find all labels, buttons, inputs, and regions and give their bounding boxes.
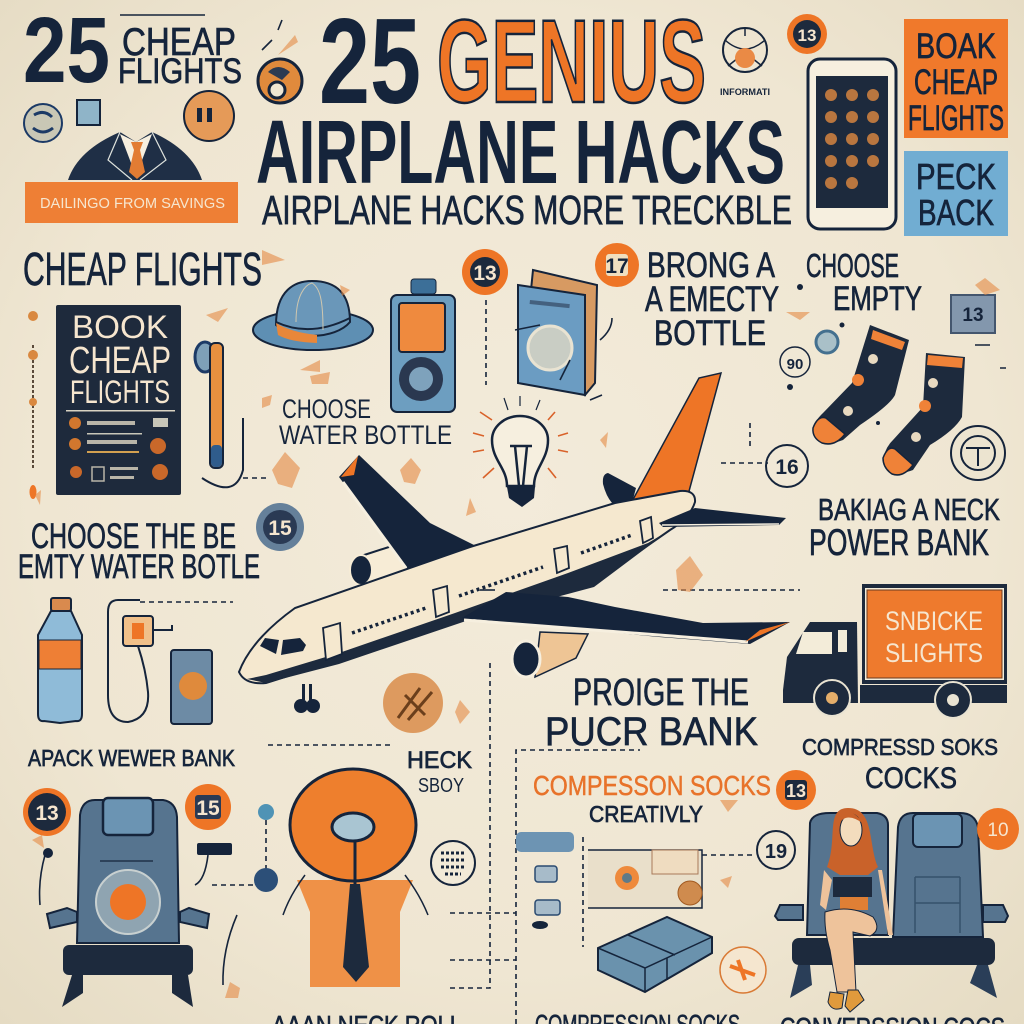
belly shading (247, 530, 670, 683)
icon: airplane seat with emblem (47, 798, 209, 1007)
number badge 13 right (776, 770, 816, 810)
text: bring an empty bottle: BOTTLE (654, 314, 766, 353)
armrests (775, 905, 1008, 922)
icon: smartphone (808, 59, 896, 229)
number badge 10 right (977, 808, 1019, 850)
number badge 19: 19 (765, 841, 787, 863)
text: bring an empty bottle: BRONG A (647, 246, 776, 285)
icon: business suit with banner: DAILINGO FROM SAVINGS (40, 195, 225, 212)
icon: socks (813, 325, 965, 475)
far stabiliser (603, 473, 636, 503)
far wing (339, 455, 476, 569)
text: choose the best empty water bottle: EMTY WATER BOTLE (18, 548, 260, 586)
top (833, 877, 872, 897)
icon: book (56, 305, 181, 495)
number badge 17: 17 (605, 255, 629, 278)
text: compression socks: COMPESSON SOCKS (533, 770, 771, 801)
text: compression socks (533, 770, 771, 827)
text: compressed socks: COMPRESSD SOKS (802, 734, 998, 760)
shoes (828, 990, 864, 1012)
title block (256, 0, 792, 233)
icon: delivery truck: SNBICKE (885, 606, 983, 636)
text: produce the power bank: PUCR BANK (545, 710, 758, 754)
icon: woman seated on airplane seats (775, 808, 1008, 1012)
bench (792, 938, 995, 965)
blue card: peck back: PECK (916, 156, 996, 197)
fuselage (239, 491, 695, 683)
icon: music player (391, 279, 455, 412)
right seat back (893, 813, 983, 937)
text: compression socks: CREATIVLY (589, 801, 703, 827)
icon: small badges top-left (24, 59, 302, 142)
doors (323, 517, 653, 660)
landing gear (294, 684, 320, 713)
near wing (462, 592, 790, 644)
icon: globe badge: INFORMATI (720, 87, 770, 97)
icon: compass circle (720, 947, 766, 993)
icon: pen (195, 342, 243, 487)
text: choose the best empty water bottle (18, 517, 260, 586)
heading: cheap flights: CHEAP FLIGHTS (23, 243, 262, 295)
text: choose water bottle: WATER BOTTLE (279, 420, 452, 450)
number badge 15 left (185, 784, 231, 830)
text: bring an empty bottle: A EMECTY (645, 280, 779, 319)
number badge 13 left: 13 (35, 802, 59, 825)
top-left heading: FLIGHTS (118, 52, 242, 91)
text: neck spot: SBOY (418, 775, 464, 797)
blue card: peck back (904, 151, 1008, 236)
blue card: peck back: BACK (918, 192, 994, 233)
text: produce the power bank: PROIGE THE (573, 672, 749, 714)
icon: ring marker (780, 331, 838, 377)
icon: power bank (171, 650, 212, 724)
icon: packing cube (598, 917, 712, 992)
icon: water bottle (38, 598, 82, 723)
text: choose empty: CHOOSE (806, 247, 899, 284)
diagram: packing chart (516, 832, 702, 929)
icon: small calendar: 13 (962, 305, 984, 326)
text: pack power bank: APACK WEWER BANK (28, 745, 236, 771)
icon: small calendar (951, 295, 995, 333)
text: compressed socks: COCKS (865, 762, 957, 795)
bottom cut-off text (272, 1009, 1005, 1024)
face (840, 814, 862, 846)
crossed legs (825, 909, 877, 992)
icon: delivery truck (783, 584, 1007, 718)
number badge 15 (256, 503, 304, 551)
orange card: book cheap flights: BOAK (916, 27, 996, 66)
rear stabiliser (659, 508, 786, 527)
airplane (239, 373, 790, 713)
icon: beaded string (28, 311, 38, 499)
text: choose water bottle: CHOOSE (282, 394, 371, 424)
text: compressed socks (802, 734, 998, 795)
icon: passport book (518, 270, 597, 395)
icon: business suit with banner (25, 132, 238, 223)
icon: round stamp (951, 426, 1005, 480)
number badge 13 top: 13 (798, 26, 816, 45)
left seat back (807, 813, 888, 935)
icon: light bulb (473, 396, 568, 507)
text: choose empty (806, 247, 922, 318)
icon: left connector node (254, 804, 278, 892)
top-left heading (23, 0, 242, 102)
number badge 15 left: 15 (196, 797, 220, 820)
icon: ring marker: 90 (787, 356, 803, 373)
icon: delivery truck: SLIGHTS (885, 638, 983, 668)
text: neck spot (407, 747, 472, 797)
bench legs (790, 965, 997, 998)
midriff (840, 897, 868, 910)
icon: hat (253, 281, 373, 350)
connector lines (140, 300, 800, 1024)
arms (820, 870, 893, 935)
icon: globe badge (720, 28, 770, 97)
text: choose the best empty water bottle: CHOOSE THE BE (31, 517, 236, 556)
icon: medallion (383, 673, 443, 733)
number badge 16 (766, 445, 808, 487)
icon: book: CHEAP (69, 340, 171, 382)
number badge 10 right: 10 (987, 820, 1009, 841)
far engine (350, 546, 418, 590)
cockpit window (260, 638, 306, 655)
number badge 13 (462, 249, 508, 295)
tail fin (630, 373, 721, 505)
number badge 13 top (787, 14, 827, 54)
number badge 15: 15 (268, 517, 292, 540)
text: neck spot: HECK (407, 747, 472, 774)
icon: book: BOOK (72, 309, 168, 345)
near engine (512, 632, 588, 677)
number badge 13 right: 13 (786, 781, 806, 801)
icon: neck pillow with figure (283, 769, 428, 987)
text: produce the power bank (545, 672, 758, 754)
subtitle: AIRPLANE HACKS MORE TRECKBLE (262, 187, 792, 233)
orange card: book cheap flights (904, 19, 1008, 138)
hair (827, 808, 878, 875)
number badge 16: 16 (775, 456, 799, 479)
hair fringe (838, 812, 864, 826)
number badge 13 left (23, 788, 71, 836)
passenger window rows (352, 535, 632, 633)
text: bring an empty bottle (645, 246, 779, 353)
text: baking a neck power bank (809, 492, 1000, 563)
text: choose empty: EMPTY (833, 280, 922, 318)
top-left heading: 25 (23, 0, 110, 102)
top-left heading: CHEAP (122, 21, 236, 64)
text: choose water bottle (279, 394, 452, 450)
icon: small circle stamp (431, 841, 475, 885)
icon: charger with cable (108, 600, 172, 722)
number badge 19 (757, 831, 795, 869)
icon: book: FLIGHTS (70, 374, 170, 410)
number badge 13: 13 (473, 262, 497, 285)
number badge 17 (595, 243, 639, 287)
